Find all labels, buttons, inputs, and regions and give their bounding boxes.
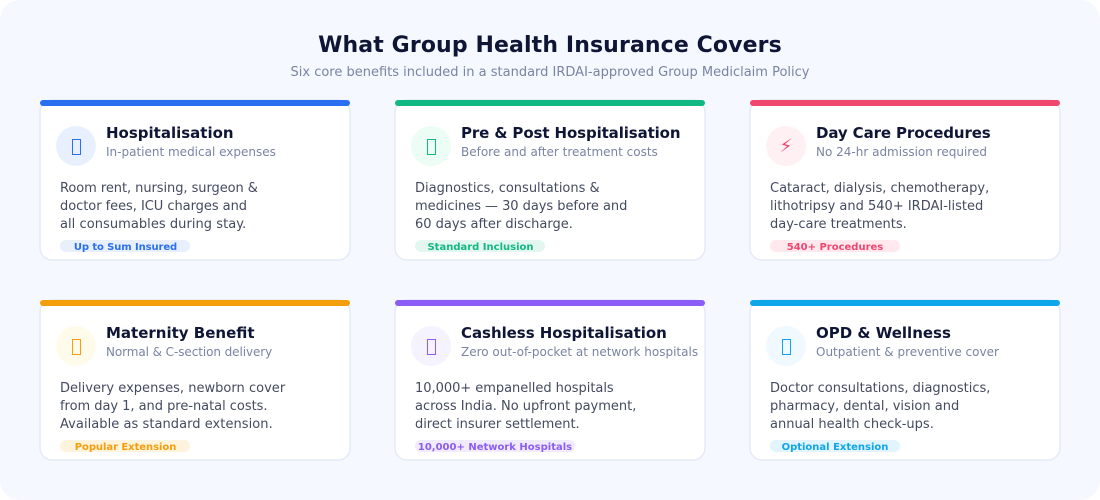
panel: OPD & Wellness: Doctor consultations, diagnostics, bbox=[770, 381, 990, 396]
panel: Hospitalisation: Hospitalisation bbox=[106, 124, 234, 142]
panel: Maternity Benefit: Popular Extension bbox=[75, 442, 176, 453]
panel: Hospitalisation: Up to Sum Insured bbox=[74, 242, 177, 253]
panel: Cashless Hospitalisation: Zero out-of-pocket at network hospitals bbox=[461, 345, 698, 359]
panel: Maternity Benefit: Maternity Benefit bbox=[106, 324, 255, 342]
panel: Maternity Benefit: Delivery expenses, newborn cover bbox=[60, 381, 286, 396]
panel: Cashless Hospitalisation: 10,000+ Network Hospitals bbox=[418, 442, 572, 453]
panel: Pre & Post Hospitalisation bbox=[395, 100, 705, 260]
panel: Day Care Procedures bbox=[750, 100, 1060, 260]
panel: Maternity Benefit: Normal & C-section delivery bbox=[106, 345, 272, 359]
panel: Maternity Benefit: from day 1, and pre-natal costs. bbox=[60, 399, 267, 414]
panel: Pre & Post Hospitalisation: medicines — 30 days before and bbox=[415, 199, 627, 214]
panel: Hospitalisation: In-patient medical expenses bbox=[106, 145, 276, 159]
panel: Day Care Procedures: day-care treatments. bbox=[770, 217, 907, 232]
panel: OPD & Wellness: pharmacy, dental, vision and bbox=[770, 399, 959, 414]
panel: Pre & Post Hospitalisation: 60 days after discharge. bbox=[415, 217, 573, 232]
panel: Day Care Procedures: lithotripsy and 540+ IRDAI-listed bbox=[770, 199, 983, 214]
panel: Hospitalisation: all consumables during stay. bbox=[60, 217, 246, 232]
panel: OPD & Wellness: Outpatient & preventive cover bbox=[816, 345, 999, 359]
panel: Cashless Hospitalisation: Cashless Hospitalisation bbox=[461, 324, 667, 342]
panel: OPD & Wellness: annual health check-ups. bbox=[770, 417, 934, 432]
panel: Cashless Hospitalisation: across India. No upfront payment, bbox=[415, 399, 636, 414]
panel: Day Care Procedures: 540+ Procedures bbox=[787, 242, 883, 253]
panel: Pre & Post Hospitalisation: Before and after treatment costs bbox=[461, 145, 658, 159]
panel: Pre & Post Hospitalisation: Standard Inclusion bbox=[427, 242, 534, 253]
subtitle: Six core benefits included in a standard IRDAI-approved Group Mediclaim Policy bbox=[291, 65, 810, 80]
panel: Cashless Hospitalisation: 10,000+ empanelled hospitals bbox=[415, 381, 614, 396]
panel: Hospitalisation bbox=[40, 100, 350, 260]
panel: Hospitalisation: Room rent, nursing, surgeon & bbox=[60, 181, 258, 196]
panel: Pre & Post Hospitalisation: Pre & Post Hospitalisation bbox=[461, 124, 680, 142]
panel: Day Care Procedures: Cataract, dialysis, chemotherapy, bbox=[770, 181, 989, 196]
panel: Maternity Benefit: Available as standard extension. bbox=[60, 417, 273, 432]
panel: OPD & Wellness: Optional Extension bbox=[782, 442, 888, 453]
panel: Hospitalisation: doctor fees, ICU charges and bbox=[60, 199, 247, 214]
panel: Day Care Procedures: No 24-hr admission required bbox=[816, 145, 987, 159]
panel: Day Care Procedures: ⚡︎ bbox=[780, 136, 792, 157]
panel: Day Care Procedures: Day Care Procedures bbox=[816, 124, 991, 142]
panel: Cashless Hospitalisation bbox=[395, 300, 705, 460]
panel: Cashless Hospitalisation: direct insurer settlement. bbox=[415, 417, 580, 432]
panel: OPD & Wellness bbox=[750, 300, 1060, 460]
panel: Maternity Benefit bbox=[40, 300, 350, 460]
panel: Pre & Post Hospitalisation: Diagnostics, consultations & bbox=[415, 181, 600, 196]
panel: OPD & Wellness: OPD & Wellness bbox=[816, 324, 951, 342]
title: What Group Health Insurance Covers bbox=[318, 33, 782, 58]
